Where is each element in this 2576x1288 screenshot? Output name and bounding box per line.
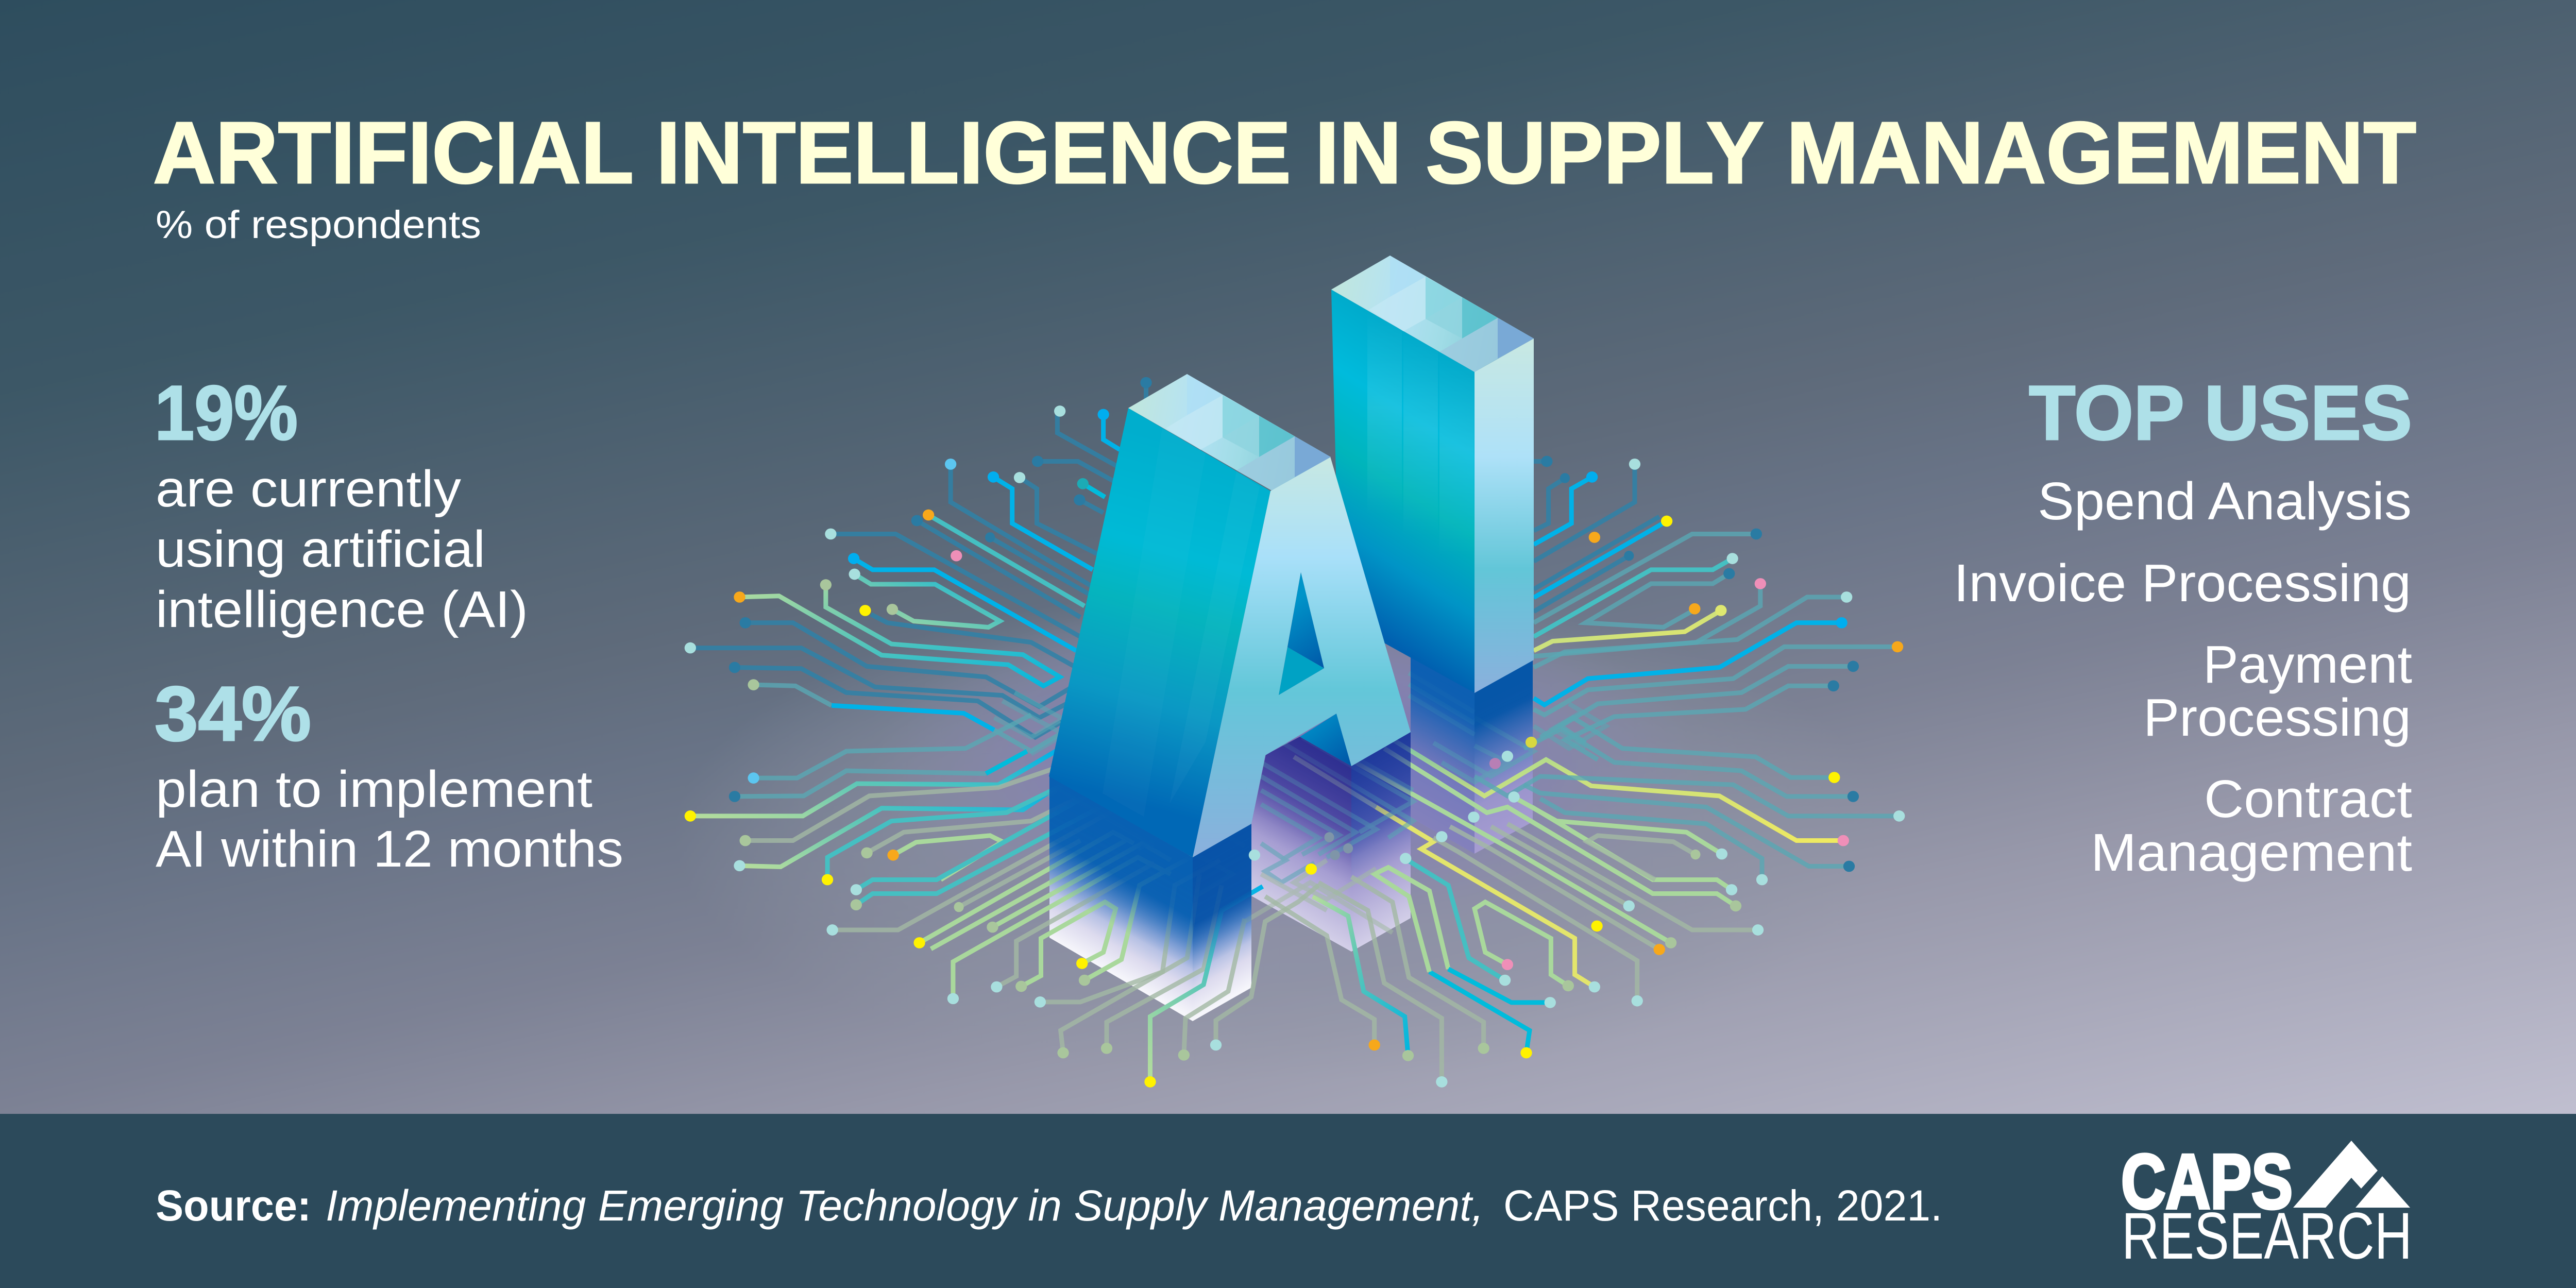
text: are currently using AI: intelligence (AI) [156,581,528,638]
letter A [1049,374,1411,857]
right panel: top uses [1954,369,2412,882]
reflection overlays [1049,657,1533,1021]
circuit traces [690,383,1899,1082]
list of uses: Management [2091,823,2412,882]
dull blue dots [729,377,1859,872]
A right wall behind leg [1300,714,1351,766]
text: plan to implement [156,760,623,878]
I left face [1331,290,1475,693]
source citation: Implementing Emerging Technology in Supply Management, [326,1181,1484,1230]
yellow dots [685,516,1840,1088]
central chip network [994,673,1606,933]
A front face with counter [1193,456,1411,857]
I right face [1475,338,1534,693]
circuit end dots [685,377,1905,1088]
text: are currently using AI [156,460,528,638]
source citation: CAPS Research, 2021. [1503,1181,1942,1230]
orange dots [734,510,1903,1050]
list of uses: Spend Analysis [2038,471,2412,531]
text: are currently using AI: using artificial [156,520,485,578]
list of uses [1954,471,2412,882]
A top face [1128,374,1331,490]
footer band [0,1114,2576,1288]
logo wordmark: CAPS: CAPS [2121,1138,2293,1225]
I top face [1331,256,1534,372]
subtitle: % of respondents [156,203,481,247]
text: plan to implement: plan to implement [156,760,592,818]
pink dots [951,550,1849,970]
source citation: Source: [156,1181,311,1230]
left panel: adoption statistics [155,369,623,878]
sage dots [739,579,1741,1061]
stat: 34%: 34% [155,670,311,757]
source citation [156,1181,1942,1230]
logo wordmark: RESEARCH: RESEARCH [2122,1199,2412,1273]
pale dots [685,405,1905,1088]
A left face [1049,408,1270,857]
text: plan to implement: AI within 12 months [156,820,623,878]
icon: mountain peaks [2293,1141,2410,1208]
text: are currently using AI: are currently [156,460,461,518]
heading: top uses: TOP USES [2029,369,2412,456]
title: ARTIFICIAL INTELLIGENCE IN SUPPLY MANAGEMENT [153,104,2416,202]
list of uses: Processing [2143,688,2411,747]
stat: 19%: 19% [155,369,298,456]
circuit glow [675,587,1891,1082]
bright blue dots [748,409,1848,784]
letter I [1331,256,1534,693]
list of uses: Invoice Processing [1954,553,2411,613]
CAPS Research logo [2121,1138,2412,1273]
A counter interior [1287,572,1324,668]
list of uses: Payment [2203,635,2412,694]
list of uses: Contract [2204,769,2412,828]
letter reflections [1049,657,1533,1021]
